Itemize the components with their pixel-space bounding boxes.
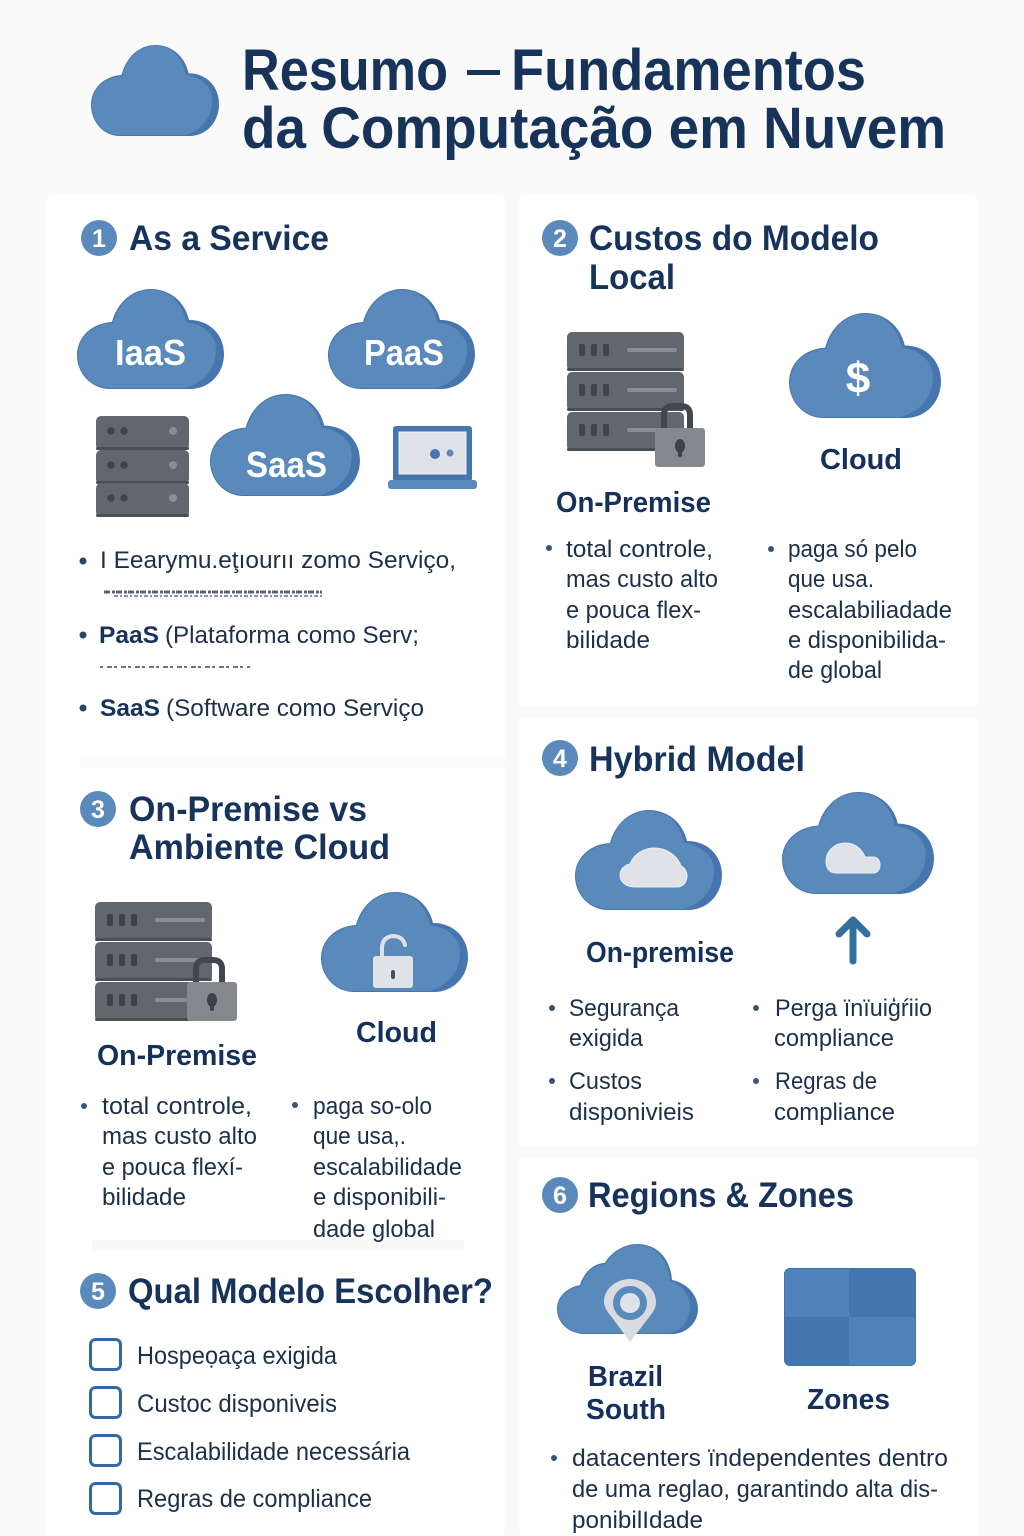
heading: as a service: As a Service [129, 219, 329, 258]
list: cloud: que usa,. [313, 1123, 406, 1150]
label: brazil south [586, 1361, 666, 1426]
label: cloud: Cloud [820, 444, 902, 476]
heading: custos: Custos do Modelo [589, 219, 879, 258]
label: brazil south: Brazil [588, 1361, 663, 1393]
list: cloud costs: de global [788, 657, 882, 684]
list: on-premise: total controle, [102, 1093, 252, 1120]
list: on-premise costs: bilidade [566, 627, 650, 654]
list: left column: disponivieis [569, 1099, 694, 1126]
panel: custos do modelo local [519, 195, 978, 707]
icon: zones grid [784, 1268, 916, 1366]
title [242, 38, 946, 161]
checklist: Custoc disponiveis [137, 1390, 337, 1418]
heading: on-premise vs cloud: 3 [91, 796, 105, 824]
list: cloud: dade global [313, 1216, 435, 1243]
heading: hybrid model: 4 [553, 745, 567, 773]
panel: hybrid model [519, 718, 978, 1147]
label: on-premise: On-Premise [556, 487, 711, 519]
title: Resumo [242, 38, 448, 103]
heading: on-premise vs cloud: Ambiente Cloud [129, 828, 390, 867]
icon: location cloud [557, 1244, 698, 1342]
list: cloud [292, 1093, 462, 1243]
list: cloud: paga so-olo [313, 1093, 432, 1120]
list: right column: compliance [774, 1099, 895, 1126]
list: service models: (Plataforma como Serv; [165, 622, 419, 649]
heading: custos [542, 219, 879, 297]
list: left column [549, 995, 694, 1126]
icon: laptop [388, 426, 477, 489]
list: service models: PaaS [99, 622, 159, 649]
label: on-premise: On-Premise [97, 1040, 257, 1072]
panel: qual modelo escolher [80, 1272, 493, 1514]
label: brazil south: South [586, 1394, 666, 1426]
list: on-premise: e pouca flexí- [102, 1154, 243, 1181]
icon: IaaS cloud [77, 289, 224, 389]
heading: on-premise vs cloud: On-Premise vs [129, 790, 367, 829]
list: right column: Perga ïnïuiģŕiio [775, 995, 932, 1022]
icon: locked server [567, 332, 705, 467]
title: da Computação em Nuvem [242, 96, 946, 161]
list: left column: Segurança [569, 995, 680, 1022]
heading: qual modelo: 5 [91, 1278, 105, 1306]
list: cloud: escalabilidade [313, 1154, 462, 1181]
list: left column: exigida [569, 1025, 644, 1052]
list: service models [80, 547, 456, 722]
icon: title cloud [91, 45, 219, 136]
icon: PaaS cloud: PaaS [364, 332, 444, 373]
icon: PaaS cloud [328, 289, 475, 389]
heading: as a service: 1 [92, 225, 106, 253]
heading: qual modelo: Qual Modelo Escolher? [128, 1272, 493, 1311]
checklist [90, 1340, 410, 1514]
icon: server rack [96, 416, 189, 517]
panel: as a service [46, 195, 505, 1536]
text: zone description: datacenters ïndependentes dentro [572, 1445, 948, 1472]
list: on-premise costs [546, 536, 718, 654]
heading: hybrid model: Hybrid Model [589, 740, 805, 779]
list: cloud costs: e disponibilida- [788, 627, 946, 654]
icon: cloud with upload [782, 792, 934, 894]
list: cloud costs: paga só pelo [788, 536, 917, 563]
list: on-premise costs: e pouca flex- [566, 597, 701, 624]
list: right column [753, 995, 932, 1126]
icon: IaaS cloud: IaaS [115, 332, 186, 373]
list: on-premise costs: mas custo alto [566, 566, 718, 593]
list: cloud: e disponibili- [313, 1184, 446, 1211]
heading: regions & zones: 6 [553, 1182, 567, 1210]
icon: dollar cloud: $ [846, 354, 870, 403]
list: right column: Regras de [775, 1068, 877, 1095]
text: zone description: ponibilIdade [572, 1507, 703, 1534]
text: zone description: de uma reglao, garantindo alta dis- [572, 1476, 938, 1503]
panel: regions and zones [519, 1157, 978, 1536]
list: cloud costs [768, 536, 952, 684]
checklist: Escalabilidade necessária [137, 1438, 410, 1466]
icon: dollar cloud [789, 313, 941, 418]
list: on-premise: bilidade [102, 1184, 186, 1211]
heading: custos: Local [589, 258, 675, 297]
checklist: Regras de compliance [137, 1485, 372, 1513]
label: on-premise: On-premise [586, 937, 734, 969]
text: zone description [551, 1445, 948, 1534]
arrow: up [839, 920, 867, 961]
list: on-premise: mas custo alto [102, 1123, 257, 1150]
icon: on-premise cloud [575, 810, 722, 910]
list: left column: Custos [569, 1068, 642, 1095]
heading: regions & zones: Regions & Zones [588, 1176, 854, 1215]
heading: on-premise vs cloud [80, 790, 390, 867]
panel: on-premise vs cloud [80, 790, 468, 1243]
list: on-premise [81, 1093, 257, 1211]
heading: custos: 2 [553, 225, 567, 253]
list: service models: I Eearymu.eţıourıı zomo Serviço, [100, 547, 456, 574]
label: zones: Zones [807, 1384, 890, 1416]
title: Fundamentos [511, 38, 866, 103]
list: right column: compliance [774, 1025, 894, 1052]
icon: SaaS cloud [210, 394, 360, 496]
list: service models: SaaS [100, 695, 160, 722]
checklist: Hospeọaça exigida [137, 1342, 337, 1370]
list: cloud costs: escalabiliadade [788, 597, 952, 624]
list: cloud costs: que usa. [788, 566, 874, 593]
icon: SaaS cloud: SaaS [246, 444, 327, 485]
list: service models: (Software como Serviço [166, 695, 424, 722]
label: cloud: Cloud [356, 1017, 437, 1049]
list: on-premise costs: total controle, [566, 536, 713, 563]
icon: unlocked cloud [321, 892, 468, 992]
icon: locked server [95, 902, 237, 1021]
